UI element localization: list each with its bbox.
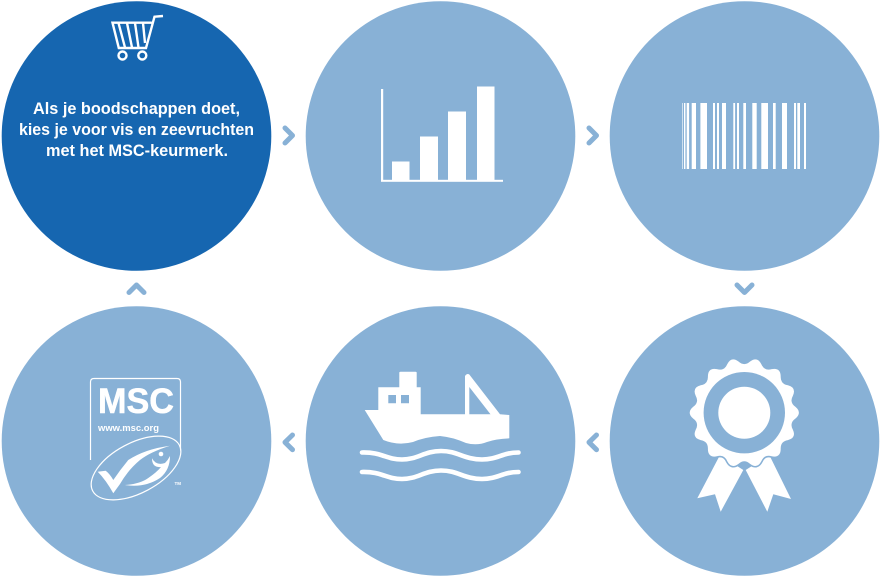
panel: MSC label step — [2, 306, 271, 576]
icon: MSC logo: TM — [174, 481, 181, 486]
panel: certificate step — [610, 306, 879, 576]
panel: sales chart step — [306, 1, 575, 271]
icon: MSC logo — [81, 378, 191, 513]
arrow: certificate to vessel — [589, 435, 596, 450]
arrow: chart to barcode — [589, 128, 596, 143]
text: shopping caption: met het MSC-keurmerk. — [46, 142, 228, 160]
panel: barcode step — [610, 1, 879, 271]
text: shopping caption: Als je boodschappen doet, — [33, 100, 240, 118]
arrow: barcode to certificate — [737, 285, 752, 292]
icon: fishing boat — [362, 372, 518, 479]
arrow: vessel to label — [285, 435, 292, 450]
waves — [362, 451, 518, 479]
icon: MSC logo: www.msc.org — [97, 423, 159, 434]
icon: bar chart — [381, 86, 503, 182]
icon: rosette — [690, 359, 799, 512]
panel: fishing vessel step — [306, 306, 575, 576]
text: shopping caption: kies je voor vis en zeevruchten — [19, 121, 254, 139]
arrow: label to shopping — [129, 285, 144, 292]
icon: barcode — [682, 103, 806, 169]
text: shopping caption — [19, 100, 254, 160]
icon: shopping cart — [112, 16, 163, 60]
arrow: shopping to chart — [285, 128, 292, 143]
icon: MSC logo: MSC — [98, 382, 174, 421]
panel: shopping step — [2, 1, 271, 271]
